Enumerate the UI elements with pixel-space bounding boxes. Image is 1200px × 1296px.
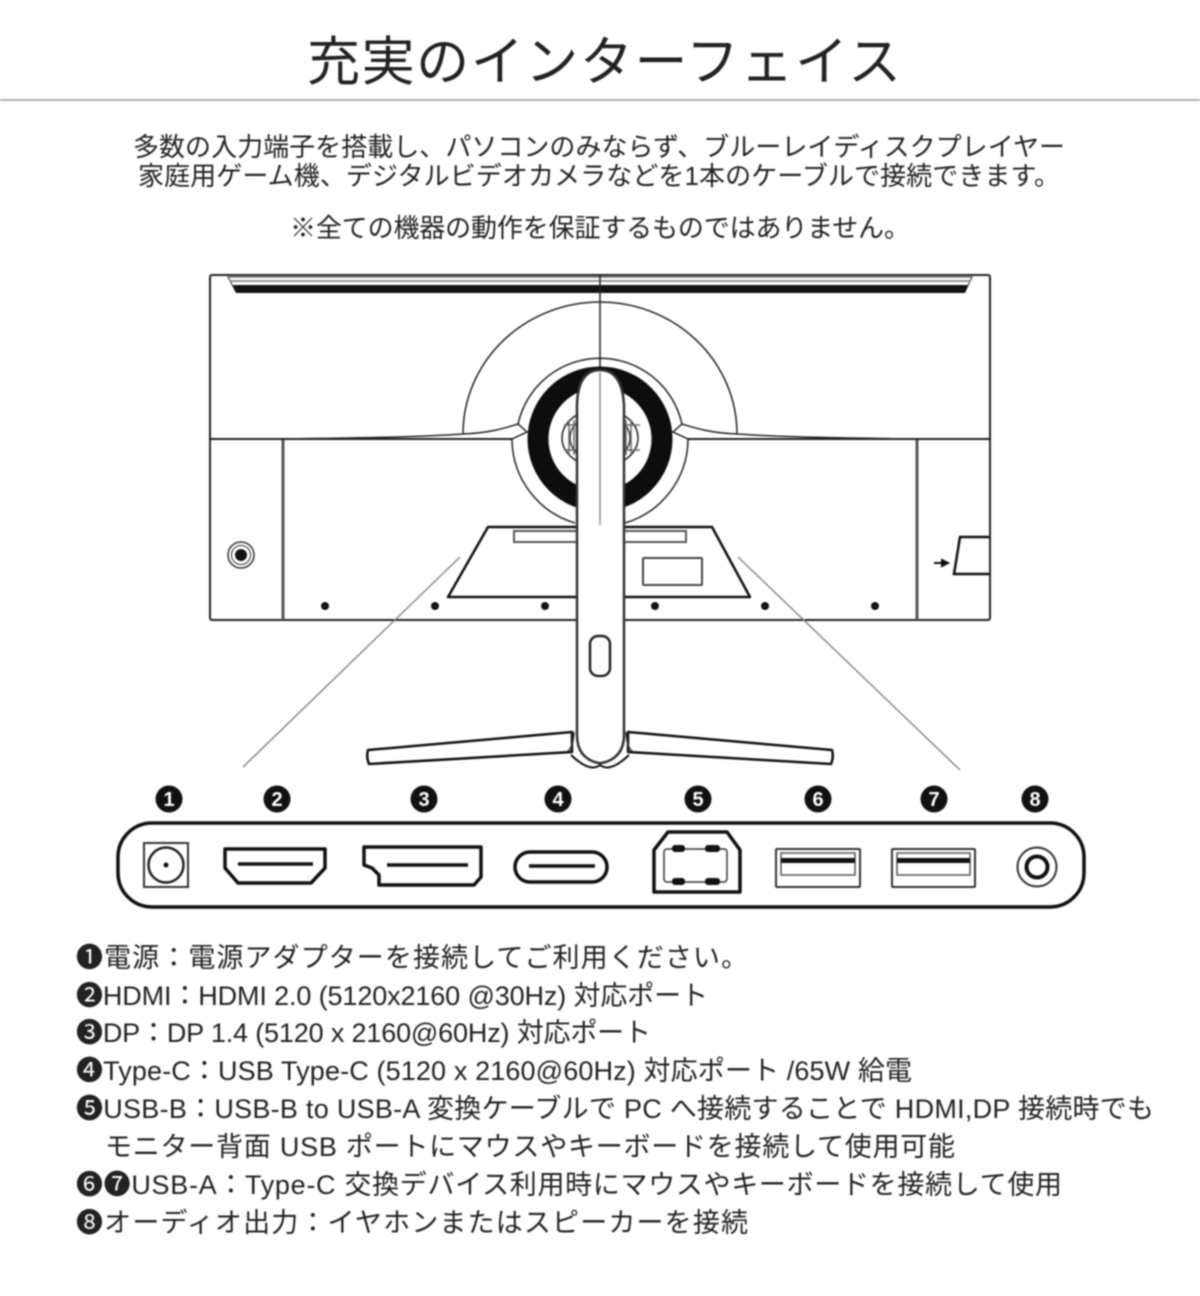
port panel xyxy=(118,823,1084,907)
port 5: USB-B xyxy=(654,832,740,892)
port description list: ❸DP：DP 1.4 (5120 x 2160@60Hz) 対応ポート xyxy=(76,1018,651,1048)
port number markers: 7 xyxy=(928,789,940,811)
port number markers: 3 xyxy=(418,789,430,811)
port number markers: 2 xyxy=(271,789,283,811)
port 3: DisplayPort xyxy=(364,847,481,885)
note text: ※全ての機器の動作を保証するものではありません。 xyxy=(290,213,910,243)
port 6: USB-A xyxy=(776,849,860,887)
port 4: USB Type-C xyxy=(515,852,607,882)
rear hump arc xyxy=(463,302,737,434)
port 8: audio jack xyxy=(1018,848,1056,886)
port description list: ❺USB-B：USB-B to USB-A 変換ケーブルで PC へ接続することで HDMI,DP 接続時でも xyxy=(76,1094,1154,1124)
stand neck xyxy=(566,370,634,767)
port description list: ❻❼USB-A：Type-C 交換デバイス利用時にマウスやキーボードを接続して使用 xyxy=(76,1170,1062,1200)
port number markers: 1 xyxy=(163,789,175,811)
stand mount ring xyxy=(512,358,688,523)
port description list: ❶電源：電源アダプターを接続してご利用ください。 xyxy=(76,943,748,973)
side port opening and arrow xyxy=(934,537,989,574)
port number markers: 6 xyxy=(812,789,824,811)
port number markers: 8 xyxy=(1029,789,1041,811)
port number markers xyxy=(156,786,1048,812)
port description list: モニター背面 USB ポートにマウスやキーボードを接続して使用可能 xyxy=(105,1132,955,1162)
right foot xyxy=(628,732,833,764)
port description list: ❷HDMI：HDMI 2.0 (5120x2160 @30Hz) 対応ポート xyxy=(76,981,708,1011)
power button xyxy=(228,542,254,568)
port 1: power jack xyxy=(144,843,188,887)
monitor body xyxy=(210,275,990,620)
top vent strip xyxy=(228,277,972,293)
port number markers: 5 xyxy=(692,789,704,811)
base plate xyxy=(448,527,750,597)
intro text block: 多数の入力端子を搭載し、パソコンのみならず、ブルーレイディスクプレイヤー xyxy=(133,132,1065,162)
port 7: USB-A xyxy=(892,849,975,887)
port number markers: 4 xyxy=(552,789,564,811)
intro text block: 家庭用ゲーム機、デジタルビデオカメラなどを1本のケーブルで接続できます。 xyxy=(138,161,1060,191)
leader line right xyxy=(738,557,960,770)
port 2: HDMI xyxy=(225,849,325,883)
screw holes xyxy=(321,602,879,610)
title: 充実のインターフェイス xyxy=(307,33,901,92)
port description list: ❽オーディオ出力：イヤホンまたはスピーカーを接続 xyxy=(76,1208,748,1238)
left foot xyxy=(367,732,572,764)
port description list xyxy=(76,943,1154,1238)
monitor rear illustration xyxy=(210,275,990,770)
intro text block xyxy=(133,132,1065,191)
port description list: ❹Type-C：USB Type-C (5120 x 2160@60Hz) 対応ポート /65W 給電 xyxy=(76,1056,912,1086)
leader line left xyxy=(243,557,460,767)
